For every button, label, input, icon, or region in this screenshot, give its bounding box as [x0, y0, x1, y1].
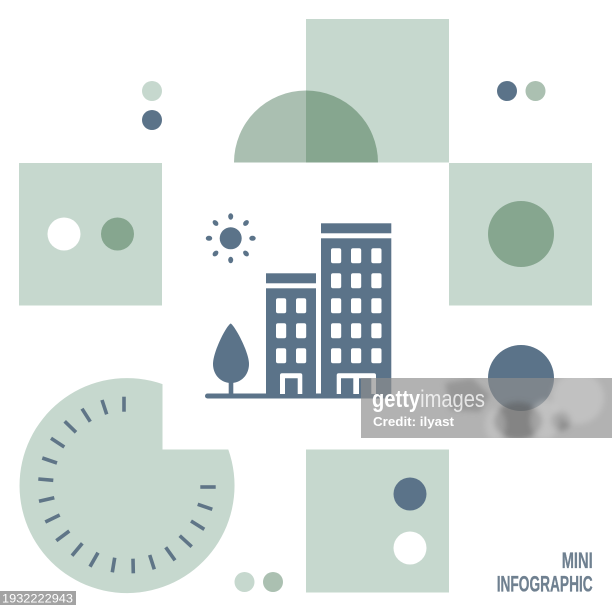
- icon: top-left dot pair: [142, 81, 162, 130]
- title: mini infographic: MINI: [562, 548, 593, 573]
- watermark: image id: [0, 591, 76, 606]
- panel: right square: [449, 163, 592, 306]
- icon: white dot: [48, 218, 80, 250]
- icon: top-right dot pair: [497, 81, 546, 101]
- watermark: credit line: Credit: ilyast: [373, 415, 455, 429]
- watermark: gettyimages logo: gettyimages: [372, 386, 485, 413]
- title: mini infographic: [497, 548, 593, 596]
- icon: green circle: [488, 201, 554, 267]
- icon: tall building: [321, 223, 391, 397]
- icon: bottom dot pair: [234, 572, 283, 592]
- icon: blue dot: [394, 478, 426, 510]
- icon: half circle: [234, 90, 378, 162]
- icon: tree and ground: [205, 324, 391, 398]
- icon: white dot: [394, 532, 426, 564]
- panel: bottom square: [306, 450, 449, 592]
- panel: top square: [306, 19, 449, 162]
- icon: large blue circle: [488, 345, 554, 411]
- watermark band: [361, 378, 612, 438]
- watermark: image id: 1932222943: [2, 594, 73, 606]
- panel: left square: [19, 163, 162, 306]
- chart: radial dial with ticks: [20, 378, 235, 593]
- icon: short building: [266, 273, 316, 397]
- icon: green dot: [101, 218, 134, 250]
- icon: sun: [206, 213, 256, 263]
